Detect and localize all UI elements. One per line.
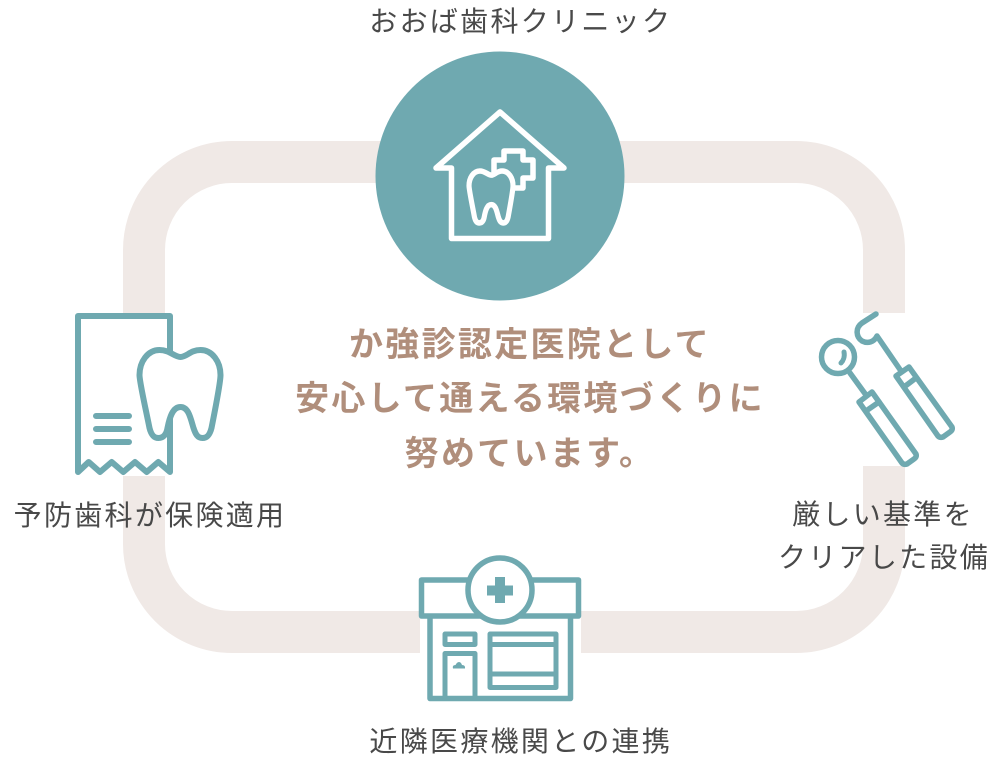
heading: clinic name: おおば歯科クリニック — [369, 6, 672, 37]
label: preventive dentistry: 予防歯科が保険適用 — [14, 500, 286, 531]
cycle track — [118, 162, 910, 658]
label: equipment — [778, 499, 990, 573]
central message — [295, 326, 765, 473]
hub circle with house icon — [376, 52, 624, 300]
label: equipment: クリアした設備 — [778, 542, 990, 573]
icon: receipt and tooth — [78, 316, 220, 472]
mirror — [822, 340, 916, 464]
icon: house with tooth and cross — [436, 112, 564, 238]
icon: medical building — [422, 558, 578, 698]
icon: dental tools — [822, 314, 952, 464]
central message: か強診認定医院として — [349, 326, 711, 364]
door handle — [453, 662, 465, 668]
probe — [857, 314, 952, 437]
label: medical cooperation: 近隣医療機関との連携 — [369, 726, 672, 757]
central message: 努めています。 — [405, 435, 655, 473]
label: equipment: 厳しい基準を — [792, 499, 974, 530]
central message: 安心して通える環境づくりに — [295, 380, 765, 418]
